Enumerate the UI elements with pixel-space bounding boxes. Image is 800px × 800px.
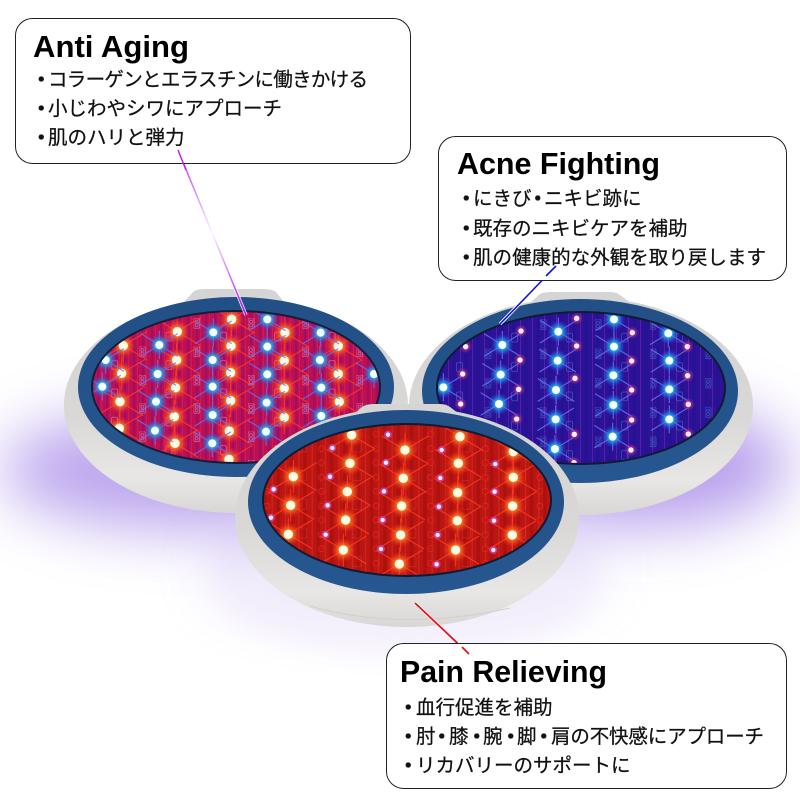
heading: Pain Relieving xyxy=(400,654,607,689)
pointer line: acne fighting xyxy=(500,266,556,324)
device body xyxy=(64,297,408,513)
LEDs: white-violet xyxy=(267,431,499,568)
blue ring xyxy=(248,410,564,594)
bullet list: にきび xyxy=(473,188,532,210)
heading: Anti Aging xyxy=(33,29,189,64)
LEDs: red xyxy=(96,312,363,462)
bullet list: ・ xyxy=(456,188,476,210)
device: pain relieving (front) xyxy=(235,404,579,627)
bullet list: ニキビ跡に xyxy=(544,188,642,210)
device: anti aging (left) xyxy=(64,289,408,513)
bullet list: リカバリーのサポートに xyxy=(416,755,631,777)
bullet list: 膝 xyxy=(449,726,469,748)
bullet list xyxy=(32,69,368,149)
blue ring xyxy=(78,297,394,477)
top tab xyxy=(530,292,632,304)
LED panel xyxy=(438,313,724,463)
bullet list: ・ xyxy=(32,98,51,120)
callout: pain relieving xyxy=(386,644,786,788)
blue ring xyxy=(422,299,738,483)
pointer tip over pain relieving box xyxy=(462,647,469,654)
top tab xyxy=(184,289,284,302)
bullet list: 小じわやシワにアプローチ xyxy=(48,98,282,120)
bullet list xyxy=(398,697,764,777)
bullet list: ・ xyxy=(501,726,521,748)
callout box xyxy=(386,644,786,788)
pointer line: anti aging xyxy=(178,150,246,315)
bullet list: 腕 xyxy=(483,726,503,748)
bullet list: ・ xyxy=(398,755,418,777)
bullet list: ・ xyxy=(432,726,452,748)
bullet list: 脚 xyxy=(517,726,537,748)
callout box xyxy=(16,18,410,164)
LEDs: red xyxy=(265,418,537,581)
bullet list: ・ xyxy=(398,726,418,748)
bullet list: ・ xyxy=(456,218,476,240)
LEDs: blue xyxy=(425,305,688,463)
bullet list: ・ xyxy=(467,726,487,748)
bullet list: ・ xyxy=(32,69,51,91)
bullet list: ・ xyxy=(32,127,51,149)
bullet list: 肌のハリと弾力 xyxy=(48,127,185,149)
bullet list: ・ xyxy=(398,697,418,719)
pointer line: pain relieving xyxy=(415,603,470,655)
bullet list: 既存のニキビケアを補助 xyxy=(473,218,688,240)
callout: acne fighting xyxy=(438,136,786,280)
callout box xyxy=(438,136,786,280)
bullet list: ・ xyxy=(528,188,548,210)
LED panel xyxy=(264,425,550,575)
purple glow behind devices xyxy=(0,403,790,610)
device body xyxy=(409,297,753,515)
heading: Acne Fighting xyxy=(457,146,660,181)
LEDs: pink xyxy=(454,312,695,469)
bullet list: 血行促進を補助 xyxy=(416,697,553,719)
device body xyxy=(235,407,579,627)
bullet list: ・ xyxy=(456,247,476,269)
pointer tip over acne fighting box xyxy=(546,266,556,276)
bullet list xyxy=(456,188,766,269)
bullet list: ・ xyxy=(534,726,554,748)
top tab xyxy=(352,404,462,416)
pointer tip over anti aging box xyxy=(178,150,186,170)
bullet list: 肩の不快感にアプローチ xyxy=(551,726,764,748)
callout: anti aging xyxy=(16,18,410,164)
reflection halo xyxy=(227,528,587,652)
bullet list: 肘 xyxy=(416,726,436,748)
LEDs: blue xyxy=(84,305,392,457)
body lip line xyxy=(310,606,510,620)
bullet list: 肌の健康的な外観を取り戻します xyxy=(473,247,766,269)
bullet list: コラーゲンとエラスチンに働きかける xyxy=(48,69,368,91)
LED panel xyxy=(93,312,379,462)
device: acne fighting (right) xyxy=(409,292,753,515)
